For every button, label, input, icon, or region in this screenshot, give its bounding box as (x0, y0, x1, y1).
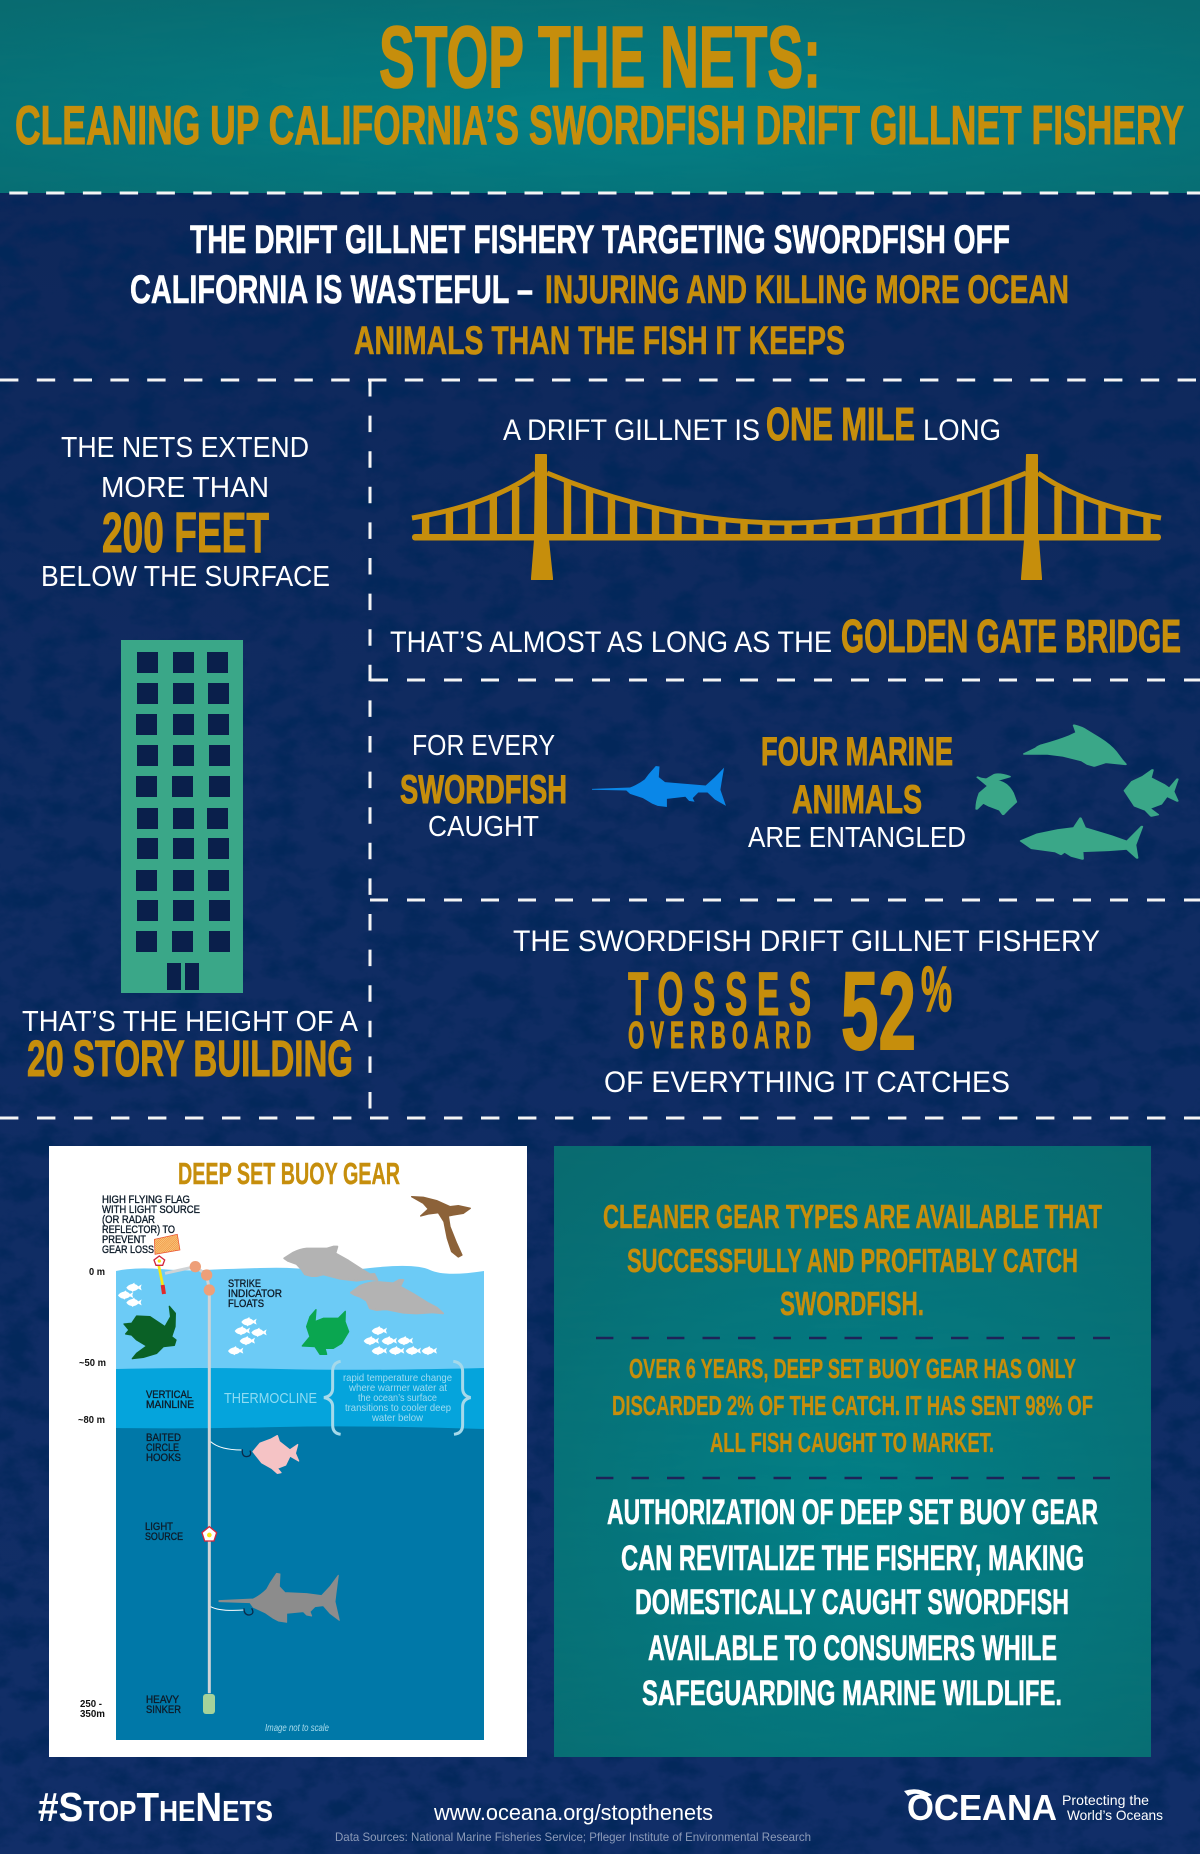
marine animals text: FOUR MARINE (761, 730, 953, 774)
icon: golden gate bridge (412, 454, 1161, 580)
baited hooks label: HOOKS (146, 1452, 181, 1464)
thermocline description (343, 1372, 452, 1424)
panel: discards (513, 925, 1100, 1099)
tosses overboard: TOSSES (628, 960, 811, 1029)
flag label: (OR RADAR (102, 1214, 155, 1226)
baited hooks label: CIRCLE (146, 1442, 179, 1454)
icon: flag pole (159, 1265, 164, 1294)
strike indicator label (228, 1278, 282, 1310)
bridge comparison (390, 610, 1181, 662)
thermocline description: rapid temperature change (343, 1372, 452, 1384)
marine animals text (748, 730, 966, 854)
authorization call to action (607, 1493, 1098, 1713)
icon: grey dolphin 1 (284, 1247, 377, 1281)
thermocline label: THERMOCLINE (224, 1391, 317, 1407)
footer (38, 1784, 1163, 1844)
baited hooks label (146, 1432, 181, 1464)
light source label: LIGHT (145, 1521, 173, 1533)
depth text: 200 FEET (102, 501, 269, 565)
water layers (116, 1266, 484, 1740)
gear statistics: ALL FISH CAUGHT TO MARKET. (710, 1427, 994, 1458)
depth text (41, 432, 330, 593)
flag label: HIGH FLYING FLAG (102, 1194, 190, 1206)
panel: discards: THE SWORDFISH DRIFT GILLNET FISHERY (513, 925, 1100, 958)
strike indicator label: FLOATS (228, 1298, 264, 1310)
icon: grey swordfish on hook (211, 1573, 339, 1622)
scale note: Image not to scale (265, 1722, 329, 1734)
icons: fish schools (118, 1283, 437, 1355)
flag label: WITH LIGHT SOURCE (102, 1204, 200, 1216)
icon: pink bait fish on hook (211, 1436, 299, 1473)
thermocline description: the ocean’s surface (358, 1392, 437, 1404)
icons: four marine animals (977, 725, 1177, 859)
website: www.oceana.org/stopthenets (433, 1800, 713, 1825)
light source label: SOURCE (145, 1531, 183, 1543)
icon: shark (1021, 818, 1142, 859)
depth scale: 250 - (80, 1698, 102, 1710)
flag label: GEAR LOSS (102, 1244, 154, 1256)
depth scale: 0 m (89, 1266, 105, 1278)
one mile heading: ONE MILE (766, 398, 915, 450)
thermocline description: where warmer water at (348, 1382, 447, 1394)
baited hooks label: BAITED (146, 1432, 181, 1444)
icon: sea turtle (977, 774, 1016, 814)
hashtag: #STOPTHENETS (38, 1784, 273, 1830)
stat: 52 percent: % (921, 953, 952, 1025)
mainline label: VERTICAL (146, 1389, 192, 1401)
logo: Oceana: Protecting the (1062, 1792, 1149, 1808)
heavy sinker label (146, 1694, 181, 1716)
depth scale: 350m (80, 1708, 105, 1720)
icon: grey dolphin 2 (351, 1280, 443, 1313)
header band (0, 0, 1200, 193)
building caption (22, 1006, 359, 1087)
icon: flag light source (154, 1256, 165, 1265)
panel: cleaner gear (554, 1146, 1151, 1757)
building caption: 20 STORY BUILDING (27, 1030, 353, 1087)
marine animals text: ANIMALS (792, 778, 922, 822)
bridge comparison: THAT’S ALMOST AS LONG AS THE (390, 626, 832, 659)
panel: net depth (22, 432, 359, 1087)
icon: blue swordfish (592, 766, 726, 807)
panel: discards: OF EVERYTHING IT CATCHES (604, 1066, 1010, 1099)
logo: Oceana: OCEANA (907, 1787, 1057, 1828)
icons: surface animals (118, 1197, 470, 1359)
strike indicator floats (190, 1261, 215, 1296)
mainline label: MAINLINE (146, 1399, 194, 1411)
thermocline description: water below (371, 1412, 423, 1424)
icon: dark green turtle (124, 1306, 176, 1359)
logo: Oceana: World’s Oceans (1067, 1807, 1163, 1823)
thermocline braces (324, 1361, 471, 1434)
swordfish text: SWORDFISH (400, 768, 567, 812)
tosses overboard: OVERBOARD (628, 1015, 811, 1057)
data sources: Data Sources: National Marine Fisheries Service; Pfleger Institute of Environmental Research (335, 1830, 811, 1844)
icon: flag (154, 1234, 180, 1254)
icon: dolphin (1024, 725, 1125, 766)
icon: sinker (203, 1694, 215, 1714)
panel: one mile net (390, 398, 1181, 662)
intro statement: ANIMALS THAN THE FISH IT KEEPS (354, 319, 845, 363)
intro statement (130, 218, 1069, 363)
depth scale: ~50 m (79, 1357, 106, 1369)
floats and mainline rigging (154, 1234, 215, 1693)
flag label: PREVENT (102, 1234, 146, 1246)
depth text: BELOW THE SURFACE (41, 561, 330, 593)
depth scale: ~80 m (78, 1414, 105, 1426)
stat: 52 percent: 52 (841, 950, 916, 1073)
mainline label (146, 1389, 194, 1411)
swordfish text: FOR EVERY (412, 730, 555, 762)
swordfish text: CAUGHT (428, 811, 539, 843)
flag label (102, 1194, 200, 1256)
icon: light source (202, 1527, 217, 1541)
panel: deep set buoy gear diagram (49, 1146, 527, 1757)
heavy sinker label: SINKER (146, 1704, 181, 1716)
panel: bycatch ratio (400, 725, 1177, 859)
depth text: THE NETS EXTEND (61, 432, 309, 464)
heavy sinker label: HEAVY (146, 1694, 180, 1706)
swordfish text (400, 730, 567, 843)
building caption: THAT’S THE HEIGHT OF A (22, 1006, 359, 1038)
flag label: REFLECTOR) TO (102, 1224, 175, 1236)
gear statistics (612, 1353, 1093, 1458)
marine animals text: ARE ENTANGLED (748, 822, 966, 854)
intro statement: CALIFORNIA IS WASTEFUL – (130, 268, 533, 312)
diagram title: DEEP SET BUOY GEAR (178, 1156, 400, 1191)
thermocline description: transitions to cooler deep (345, 1402, 451, 1414)
light source label (145, 1521, 183, 1543)
strike indicator label: INDICATOR (228, 1288, 282, 1300)
title: STOP THE NETS: (379, 9, 821, 106)
one mile heading: A DRIFT GILLNET IS (503, 414, 760, 447)
logo: Oceana (904, 1787, 1163, 1828)
one mile heading (503, 398, 1001, 450)
depth scale (78, 1266, 106, 1720)
gear statement: SWORDFISH. (780, 1285, 924, 1322)
strike indicator label: STRIKE (228, 1278, 261, 1290)
icon: 20 story building (121, 640, 243, 993)
gear statement (603, 1198, 1102, 1322)
icon: brown seabird (412, 1197, 470, 1257)
icon: opah fish (1125, 770, 1177, 816)
depth text: MORE THAN (101, 472, 269, 504)
one mile heading: LONG (923, 414, 1001, 447)
icon: green turtle (302, 1310, 349, 1354)
